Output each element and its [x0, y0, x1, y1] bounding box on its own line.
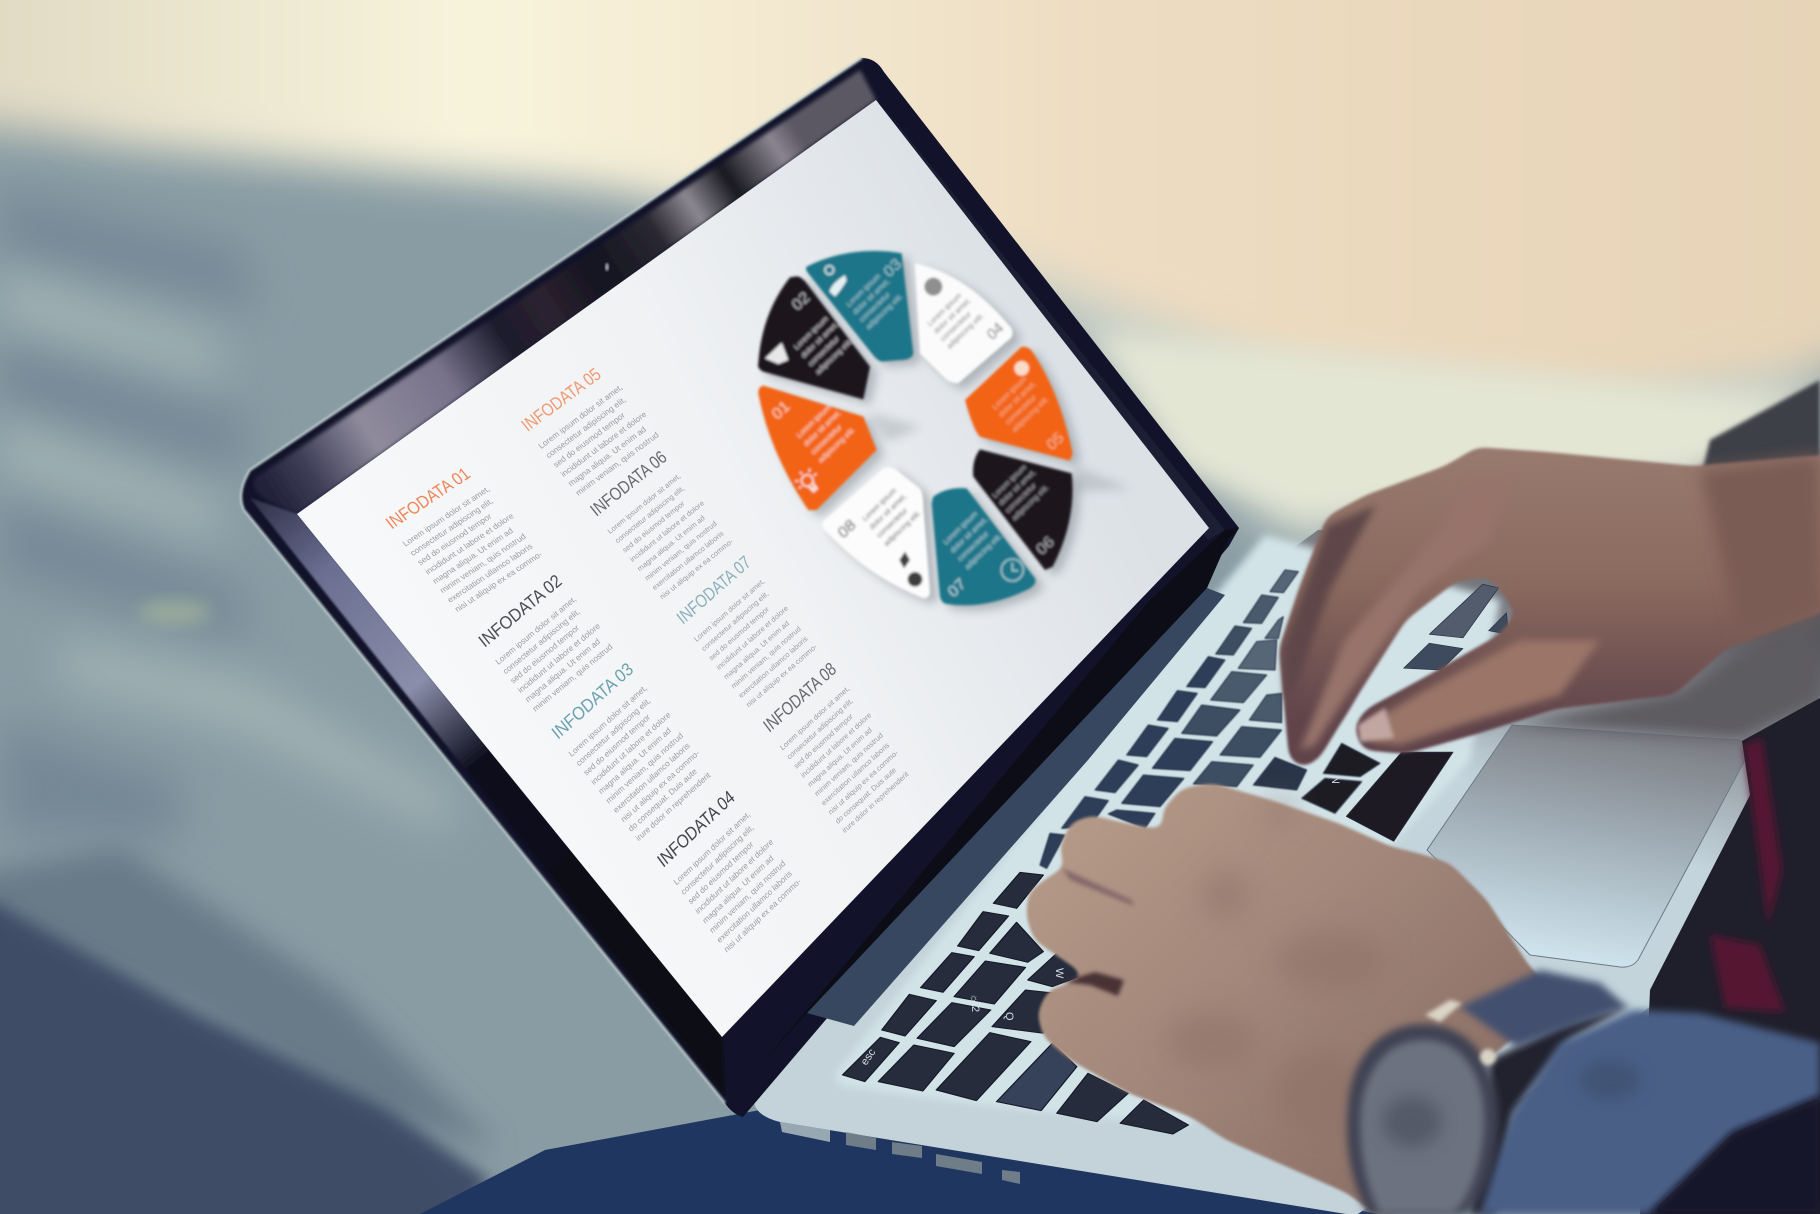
background: dark pavement core: [0, 930, 450, 1214]
segment 01 orange: [758, 386, 877, 510]
segment 04 white: Lorem ipsum: [925, 291, 963, 328]
shirt on the right: [1640, 698, 1820, 1214]
segment 03 teal: dolor sit amet,: [851, 276, 891, 316]
text block: infodata 07: [673, 551, 820, 709]
text block: infodata 08: Lorem ipsum dolor sit amet,: [778, 684, 851, 752]
segment 04 white: 04: [984, 319, 1007, 344]
watch: [1347, 970, 1630, 1214]
text block: infodata 01: nisi ut aliquip ex ea commo-: [453, 550, 544, 614]
text block: infodata 03: Lorem ipsum dolor sit amet,: [567, 683, 649, 759]
text block: infodata 05: sed do eiusmod tempor: [552, 411, 627, 469]
icon: hand and person: [825, 266, 847, 297]
segment 07 teal: Lorem ipsum: [941, 509, 979, 547]
text block: infodata 04: INFODATA 04: [654, 787, 738, 871]
segment 06 black: 06: [1033, 533, 1058, 559]
segment 01 orange: dolor sit amet,: [802, 408, 842, 448]
segment 03 teal: consectetur: [857, 290, 892, 324]
background: mid grey pavement: [0, 847, 500, 1150]
text block: infodata 06: magna aliqua. Ut enim ad: [635, 513, 707, 573]
text block: infodata 08: consectetur adipiscing elit,: [785, 696, 855, 761]
text block: infodata 06: Lorem ipsum dolor sit amet,: [606, 472, 682, 536]
segment 04 white: adipiscing elit.: [945, 311, 985, 351]
text block: infodata 03: incididunt ut labore et dolore: [590, 710, 673, 787]
text block: infodata 03: exercitation ullamco laboris: [612, 741, 692, 815]
deck shadow under forearm: [1400, 600, 1820, 745]
text block: infodata 03: sed do eiusmod tempor: [582, 712, 652, 777]
watch case: [1347, 1024, 1498, 1214]
segment 05 orange: 05: [1044, 429, 1067, 454]
segment 04 white: dolor sit amet,: [932, 296, 972, 336]
segment 01 orange: adipiscing elit.: [816, 425, 857, 465]
segment 08 white: [822, 467, 930, 598]
segments: [758, 251, 1073, 605]
text block: infodata 02: sed do eiusmod tempor: [509, 623, 581, 685]
text block: infodata 08: irure dolor in reprehenderit: [840, 769, 910, 835]
segment 05 orange: dolor sit amet,: [997, 379, 1037, 419]
text block: infodata 08: INFODATA 08: [760, 658, 840, 736]
knuckle gap: [1062, 868, 1134, 906]
text block: infodata 01: Lorem ipsum dolor sit amet,: [401, 485, 492, 548]
icon: light bulb: [791, 464, 824, 498]
segment 05 orange: adipiscing elit.: [1010, 394, 1050, 434]
text block: infodata 03: nisi ut aliquip ex ea commo-: [619, 748, 701, 824]
text block: infodata 01: magna aliqua. Ut enim ad: [431, 526, 515, 586]
text block: infodata 08: nisi ut aliquip ex ea commo-: [827, 748, 900, 817]
text block: infodata 07: magna aliqua. Ut enim ad: [722, 619, 791, 681]
bezel lower reflections: [250, 498, 725, 1096]
text block: infodata 03: irure dolor in reprehenderit: [634, 770, 713, 843]
segment 05 orange: [965, 347, 1073, 461]
text block: infodata 06: minim veniam, quis nostrud: [643, 519, 719, 583]
hand blotches: [1165, 798, 1385, 1130]
text block: infodata 06: exercitation ullamco laboris: [650, 529, 726, 592]
text block: infodata 01: exercitation ullamco laboris: [446, 542, 534, 604]
text block: infodata 03: INFODATA 03: [548, 659, 637, 743]
background: pale lower-right glow: [1090, 330, 1800, 520]
background: blue grey stripes: [0, 190, 260, 840]
keycap legends: ☼: [967, 991, 980, 1005]
segment 08 white: adipiscing elit.: [882, 508, 922, 548]
text block: infodata 04: minim veniam, quis nostrud: [708, 858, 787, 935]
hinge strip: [807, 588, 1225, 1026]
icon: round drop: [924, 278, 942, 296]
lid rim highlight: [241, 58, 862, 1103]
index finger highlight: [1300, 480, 1510, 750]
forearm shade: [1700, 455, 1820, 640]
segment 02 black: [758, 276, 870, 399]
bezel upper reflections: [254, 70, 876, 514]
segment 06 black: [973, 449, 1073, 570]
sleeve shade: [1580, 1060, 1640, 1100]
text block: infodata 02: magna aliqua. Ut enim ad: [524, 637, 602, 704]
text block: infodata 02: INFODATA 02: [475, 571, 566, 651]
text block: infodata 05: INFODATA 05: [518, 364, 605, 435]
segment shadows: [765, 256, 1131, 611]
blue sleeve: [1480, 1010, 1820, 1214]
text block: infodata 01: minim veniam, quis nostrud: [438, 532, 528, 595]
background: pale stripes: [0, 270, 460, 830]
jeans: [420, 1110, 1380, 1214]
icon: hand and piggy bank: [899, 552, 922, 587]
text block: infodata 01: incididunt ut labore et dolore: [423, 511, 516, 576]
trackpad: [1427, 725, 1746, 967]
text block: infodata 05: minim veniam, quis nostrud: [574, 430, 661, 498]
text block: infodata 06: nisi ut aliquip ex ea commo-: [658, 536, 735, 601]
text block: infodata 03: consectetur adipiscing elit,: [575, 696, 652, 768]
segment 05 orange: consectetur: [1003, 392, 1038, 427]
text block: infodata 05: magna aliqua. Ut enim ad: [567, 425, 648, 488]
segment 04 white: consectetur: [938, 309, 973, 343]
text block: infodata 03: magna aliqua. Ut enim ad: [597, 726, 673, 796]
text block: infodata 08: sed do eiusmod tempor: [792, 711, 855, 771]
text block: infodata 05: [518, 357, 664, 498]
text block: infodata 08: [760, 658, 914, 835]
text block: infodata 02: minim veniam, quis nostrud: [531, 642, 615, 714]
segment 01 orange: 01: [769, 398, 793, 423]
segment 02 black: Lorem ipsum: [792, 314, 830, 352]
text block: infodata 04: nisi ut aliquip ex ea commo-: [722, 876, 803, 954]
background: green tint: [139, 599, 211, 625]
segment 06 black: Lorem ipsum: [990, 462, 1028, 500]
left keys: [842, 872, 1188, 1134]
shirt: red plaid: [1710, 738, 1785, 1012]
keycap legends: 2: [969, 1006, 981, 1012]
segment 02 black: adipiscing elit.: [814, 337, 854, 377]
text block: infodata 04: Lorem ipsum dolor sit amet,: [672, 809, 752, 887]
text block: infodata 04: exercitation ullamco laboris: [715, 868, 794, 945]
dark corner under sleeve: [1650, 1097, 1820, 1214]
text block: infodata 04: incididunt ut labore et dolore: [693, 836, 775, 916]
background: light transition band: [100, 0, 1820, 560]
text columns: [382, 357, 914, 954]
strap dark edge: [1470, 1005, 1630, 1214]
segment 02 black: consectetur: [806, 334, 841, 368]
circular eight-segment diagram: [758, 251, 1131, 611]
text block: infodata 03: minim veniam, quis nostrud: [604, 731, 685, 806]
webcam: [605, 263, 609, 271]
text block: infodata 07: exercitation ullamco laboris: [737, 634, 810, 700]
keycap legends: W: [1053, 968, 1065, 979]
text block: infodata 07: consectetur adipiscing elit,: [700, 589, 770, 653]
text block: infodata 05: incididunt ut labore et dolore: [559, 410, 649, 479]
text block: infodata 07: incididunt ut labore et dolore: [715, 604, 790, 672]
thumb nail: [1358, 708, 1394, 742]
segment 08 white: dolor sit amet,: [868, 492, 908, 532]
laptop screen: [297, 100, 1209, 1037]
dial marks: [1382, 1096, 1442, 1148]
segment 03 teal: adipiscing elit.: [864, 292, 904, 332]
segment 03 teal: [806, 251, 913, 362]
text block: infodata 04: magna aliqua. Ut enim ad: [700, 852, 775, 926]
text block: infodata 07: minim veniam, quis nostrud: [729, 624, 803, 691]
text block: infodata 03: [548, 658, 717, 843]
keyboard keys: [842, 570, 1508, 1134]
text block: infodata 02: [475, 569, 617, 714]
text block: infodata 06: [586, 446, 736, 601]
segment 06 black: dolor sit amet,: [997, 467, 1037, 507]
segment 07 teal: [932, 488, 1036, 605]
segment 04 white: [915, 263, 1013, 383]
keycap legends: Q: [1003, 1012, 1015, 1021]
icon: burst: [1014, 361, 1029, 376]
background: warm beige upper area: [0, 0, 1820, 400]
text block: infodata 05: consectetur adipiscing elit,: [544, 395, 628, 460]
text block: infodata 06: incididunt ut labore et dolore: [628, 499, 706, 564]
text block: infodata 02: consectetur adipiscing elit,: [501, 607, 582, 676]
keycap legends: 1: [974, 1031, 983, 1044]
keycap legends: esc: [859, 1046, 879, 1068]
segment 07 teal: 07: [945, 575, 969, 601]
text block: infodata 08: incididunt ut labore et dolore: [799, 710, 873, 780]
finger gap: [1062, 972, 1124, 996]
back finger shadow: [1283, 505, 1376, 700]
text block: infodata 01: [382, 459, 546, 614]
segment 03 teal: 03: [880, 255, 905, 281]
text block: infodata 07: sed do eiusmod tempor: [707, 604, 771, 662]
laptop lower deck: [754, 530, 1820, 1214]
keyboard well: [835, 535, 1500, 1125]
segment 05 orange: Lorem ipsum: [990, 374, 1028, 412]
text block: infodata 01: INFODATA 01: [382, 464, 474, 533]
text block: infodata 08: minim veniam, quis nostrud: [813, 731, 885, 798]
text block: infodata 08: do consequat. Duis aute: [833, 765, 898, 826]
middle keys: [1040, 570, 1380, 868]
segment 06 black: consectetur: [1003, 481, 1038, 515]
segment 07 teal: dolor sit amet,: [949, 515, 989, 555]
icon: pyramid: [765, 343, 788, 364]
left hand typing: [1026, 783, 1560, 1214]
segment 03 teal: Lorem ipsum: [844, 271, 882, 309]
text block: infodata 02: incididunt ut labore et dolore: [516, 621, 602, 695]
right hand typing: [1279, 447, 1820, 768]
text block: infodata 07: nisi ut aliquip ex ea commo-: [744, 641, 819, 709]
segment 08 white: 08: [835, 516, 859, 542]
segment 07 teal: adipiscing elit.: [963, 532, 1003, 572]
right keys: [1346, 584, 1508, 841]
text block: infodata 08: magna aliqua. Ut enim ad: [806, 725, 874, 789]
background: dark corner top right: [1700, 380, 1820, 480]
bezel right side: [878, 100, 1225, 540]
hinge shadow: [765, 528, 1239, 1060]
text block: infodata 02: Lorem ipsum dolor sit amet,: [494, 595, 578, 667]
text block: infodata 01: consectetur adipiscing elit,: [409, 497, 495, 558]
text block: infodata 07: INFODATA 07: [673, 552, 755, 628]
text block: infodata 07: Lorem ipsum dolor sit amet,: [692, 577, 766, 644]
text block: infodata 06: consectetur adipiscing elit,: [613, 484, 686, 545]
text block: infodata 06: INFODATA 06: [586, 447, 671, 520]
background: dark lower-left pavement: [0, 880, 490, 1214]
keycap legends: [859, 776, 1341, 1068]
segment 07 teal: consectetur: [956, 529, 990, 563]
text block: infodata 08: exercitation ullamco laboris: [820, 740, 891, 807]
text block: infodata 05: Lorem ipsum dolor sit amet,: [537, 383, 625, 451]
front side ports: [780, 1122, 1020, 1184]
segment 01 orange: Lorem ipsum: [795, 402, 832, 440]
text block: infodata 03: do consequat. Duis aute: [627, 767, 699, 834]
segment 08 white: consectetur: [875, 505, 909, 540]
text block: infodata 04: sed do eiusmod tempor: [686, 839, 755, 906]
segment 02 black: dolor sit amet,: [799, 320, 840, 360]
segment 06 black: adipiscing elit.: [1010, 483, 1050, 523]
text block: infodata 04: [654, 783, 804, 954]
segment 08 white: Lorem ipsum: [860, 486, 898, 523]
text block: infodata 06: sed do eiusmod tempor: [621, 499, 687, 554]
thumb: [1370, 640, 1600, 745]
watch strap: [1460, 970, 1627, 1047]
segment 01 orange: consectetur: [809, 422, 844, 457]
keycap legends: N: [1329, 776, 1341, 784]
text block: infodata 01: sed do eiusmod tempor: [416, 512, 494, 567]
segment 02 black: 02: [789, 289, 813, 314]
lug highlights: [1425, 1000, 1496, 1065]
watch dial: [1360, 1040, 1484, 1214]
icon: clock: [1001, 559, 1023, 581]
laptop lid: [241, 58, 1239, 1117]
text block: infodata 04: consectetur adipiscing elit,: [679, 822, 756, 897]
